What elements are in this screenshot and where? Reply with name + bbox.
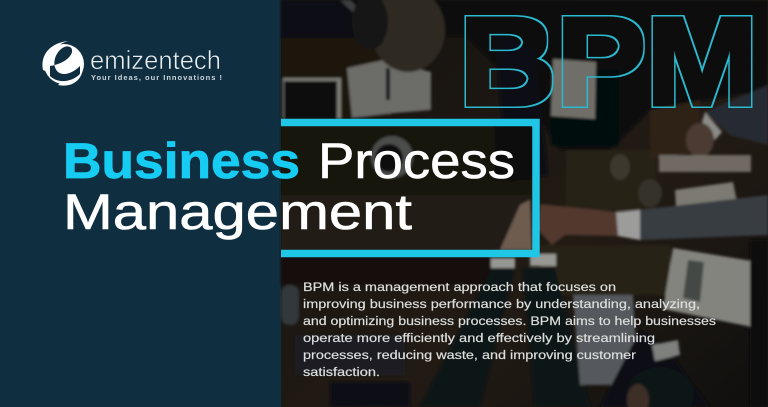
description paragraph: satisfaction.: [303, 365, 380, 379]
title word: Management: Management: [63, 184, 412, 240]
interior of frame: [281, 126, 532, 250]
laptop: [283, 78, 341, 119]
description paragraph: operate more efficiently and effectively by streamlining: [303, 331, 655, 345]
icon: e globe mark: [42, 41, 84, 86]
brand name: emizentech: [90, 45, 221, 75]
paper notebook: [347, 60, 431, 118]
left lower laptop and person: [281, 285, 299, 325]
logo: emizentech: [42, 41, 222, 86]
description paragraph: and optimizing business processes. BPM aims to help businesses: [303, 314, 716, 328]
centre document: [573, 295, 638, 385]
description paragraph: [303, 280, 716, 379]
top person head: [371, 0, 445, 72]
title: [63, 133, 515, 240]
clasped hands: [538, 204, 618, 245]
dark sleeve by BPM: [495, 30, 548, 182]
right arm: [640, 195, 768, 240]
glasses: [610, 154, 630, 180]
dark right edge: [750, 240, 768, 407]
tablet and paper: [551, 70, 619, 146]
title word: Business: Business: [63, 133, 300, 189]
forearm to bottom person: [600, 330, 710, 407]
open book: [663, 248, 764, 327]
description paragraph: BPM is a management approach that focuses on: [303, 280, 616, 294]
wood highlights: [281, 38, 391, 118]
title frame: [281, 122, 536, 254]
coffee cup: [371, 136, 413, 178]
right sleeve and hand: [705, 85, 768, 145]
panel: meeting table photo: [281, 0, 768, 407]
description paragraph: processes, reducing waste, and improving customer: [303, 348, 636, 362]
title word: Process: Process: [318, 133, 515, 189]
dark upper table area: [281, 0, 768, 36]
panel: left navy background: [0, 0, 281, 407]
description paragraph: improving business performance by understanding, analyzing,: [303, 297, 700, 311]
left and centre sleeves: [420, 265, 515, 407]
tagline: Your Ideas, our Innovations !: [91, 73, 222, 82]
